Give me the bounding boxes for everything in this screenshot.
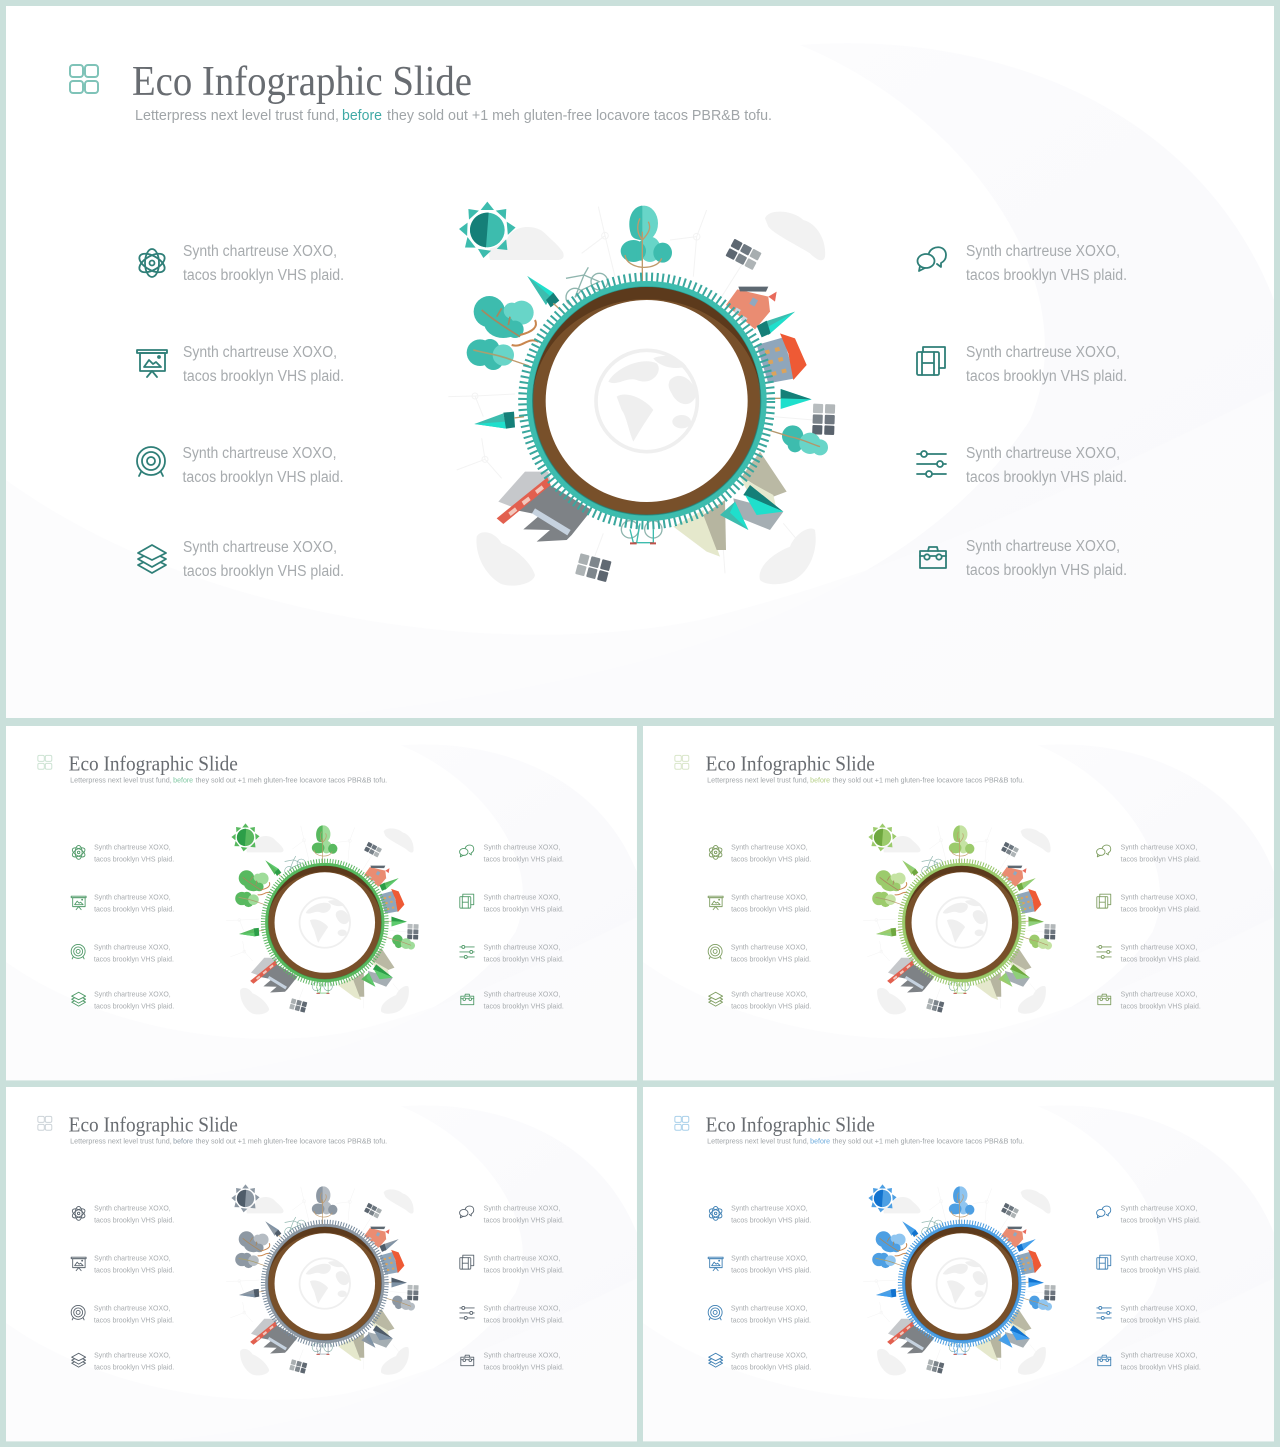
illustration: eco planet	[863, 1184, 1056, 1375]
item text: Synth chartreuse XOXO,	[182, 445, 336, 462]
left text: Synth chartreuse XOXO,	[731, 893, 808, 902]
left text: Synth chartreuse XOXO,	[94, 1351, 171, 1360]
icon: header grid	[70, 65, 98, 93]
illustration: eco planet	[226, 823, 419, 1014]
subtitle: they sold out +1 meh gluten-free locavore tacos PBR&B tofu.	[387, 107, 772, 124]
item: target	[137, 445, 344, 486]
item: briefcase	[920, 538, 1127, 579]
right icons	[460, 1206, 474, 1366]
right text	[1121, 842, 1201, 1011]
right text: Synth chartreuse XOXO,	[484, 1254, 560, 1263]
icon: briefcase	[920, 547, 946, 568]
subtitle: Letterpress next level trust fund,	[707, 776, 809, 785]
subtitle: before	[342, 107, 382, 124]
house: salmon	[726, 287, 777, 329]
right text: tacos brooklyn VHS plaid.	[484, 1002, 564, 1011]
trees: cones lower right	[720, 485, 783, 530]
subtitle	[70, 776, 387, 785]
subtitle: before	[810, 776, 830, 785]
left text: tacos brooklyn VHS plaid.	[94, 954, 174, 963]
illustration: eco planet	[448, 202, 835, 586]
right text: tacos brooklyn VHS plaid.	[484, 905, 564, 914]
right text: Synth chartreuse XOXO,	[484, 990, 560, 999]
left text	[94, 842, 174, 1011]
right text: Synth chartreuse XOXO,	[1121, 1303, 1197, 1312]
right text	[1121, 1203, 1201, 1372]
left text: Synth chartreuse XOXO,	[731, 990, 808, 999]
left text: tacos brooklyn VHS plaid.	[94, 1315, 174, 1324]
icon: film frame	[917, 347, 945, 375]
left text	[94, 1203, 174, 1372]
left text: Synth chartreuse XOXO,	[731, 1254, 808, 1263]
left text: tacos brooklyn VHS plaid.	[731, 854, 811, 863]
icon: globe	[596, 350, 697, 452]
tree: cone upper left	[527, 276, 565, 314]
left text: tacos brooklyn VHS plaid.	[731, 905, 811, 914]
illustration: eco planet	[226, 1184, 419, 1375]
item text: Synth chartreuse XOXO,	[183, 243, 337, 260]
item text: tacos brooklyn VHS plaid.	[182, 469, 344, 486]
icon: atom	[136, 249, 168, 277]
solar panel right	[812, 404, 835, 435]
tree: cone upper right	[757, 312, 795, 337]
factory	[497, 472, 592, 542]
left text	[731, 842, 811, 1011]
planet centre	[546, 300, 748, 502]
left text: tacos brooklyn VHS plaid.	[94, 1266, 174, 1275]
left icons	[71, 1206, 86, 1367]
tree: cone mid left	[474, 412, 524, 429]
house: red roof	[757, 333, 807, 383]
solar panel bottom	[575, 553, 612, 582]
subtitle: Letterpress next level trust fund,	[70, 1137, 172, 1146]
icon: header grid	[675, 755, 689, 769]
left text: tacos brooklyn VHS plaid.	[731, 954, 811, 963]
planet rim ticks	[523, 277, 771, 525]
right text: tacos brooklyn VHS plaid.	[484, 1215, 564, 1224]
right text: tacos brooklyn VHS plaid.	[1121, 1002, 1201, 1011]
right text: tacos brooklyn VHS plaid.	[1121, 1215, 1201, 1224]
subtitle: they sold out +1 meh gluten-free locavore tacos PBR&B tofu.	[196, 776, 387, 785]
illustration: eco planet	[863, 823, 1056, 1014]
subtitle: they sold out +1 meh gluten-free locavore tacos PBR&B tofu.	[833, 776, 1024, 785]
title: Eco Infographic Slide	[69, 1112, 238, 1136]
item: atom	[136, 243, 344, 284]
item text: Synth chartreuse XOXO,	[183, 344, 337, 361]
planet brown soil ring	[533, 287, 761, 515]
right text: tacos brooklyn VHS plaid.	[1121, 1363, 1201, 1372]
item text: tacos brooklyn VHS plaid.	[966, 469, 1127, 486]
right text: Synth chartreuse XOXO,	[1121, 842, 1197, 851]
right icons	[1097, 845, 1111, 1005]
item text	[966, 538, 1127, 579]
left text: tacos brooklyn VHS plaid.	[94, 1363, 174, 1372]
item: presentation	[137, 344, 344, 385]
left text: Synth chartreuse XOXO,	[731, 1303, 807, 1312]
tree: cone right	[768, 389, 812, 409]
panel: green slide	[6, 726, 637, 1080]
item text: tacos brooklyn VHS plaid.	[966, 562, 1127, 579]
item text: tacos brooklyn VHS plaid.	[183, 563, 344, 580]
left text: tacos brooklyn VHS plaid.	[94, 854, 174, 863]
subtitle	[707, 776, 1024, 785]
icon: presentation board	[137, 350, 167, 377]
item text: Synth chartreuse XOXO,	[966, 243, 1120, 260]
right text: Synth chartreuse XOXO,	[1121, 1203, 1197, 1212]
subtitle	[135, 107, 772, 124]
icon: layers	[138, 545, 166, 573]
left text: tacos brooklyn VHS plaid.	[731, 1002, 811, 1011]
left text: Synth chartreuse XOXO,	[94, 990, 171, 999]
item text: Synth chartreuse XOXO,	[183, 539, 337, 556]
item text	[183, 539, 344, 580]
subtitle: they sold out +1 meh gluten-free locavore tacos PBR&B tofu.	[196, 1137, 387, 1146]
clouds	[476, 212, 825, 586]
title: Eco Infographic Slide	[132, 59, 472, 105]
mountains	[673, 452, 787, 557]
right text: Synth chartreuse XOXO,	[484, 893, 560, 902]
left text: Synth chartreuse XOXO,	[731, 1203, 808, 1212]
left text: Synth chartreuse XOXO,	[94, 842, 171, 851]
right text: Synth chartreuse XOXO,	[484, 1351, 560, 1360]
right text: Synth chartreuse XOXO,	[1121, 1351, 1197, 1360]
right text: Synth chartreuse XOXO,	[484, 1203, 560, 1212]
title: Eco Infographic Slide	[69, 751, 238, 775]
subtitle	[70, 1137, 387, 1146]
tree: lower left	[467, 339, 529, 370]
item text: tacos brooklyn VHS plaid.	[183, 267, 344, 284]
icon: sliders	[917, 451, 946, 477]
left text	[731, 1203, 811, 1372]
right text: Synth chartreuse XOXO,	[1121, 990, 1197, 999]
item text	[182, 445, 344, 486]
right text: tacos brooklyn VHS plaid.	[484, 954, 564, 963]
tree: top centre	[621, 206, 672, 283]
item text: Synth chartreuse XOXO,	[966, 538, 1120, 555]
left text: tacos brooklyn VHS plaid.	[731, 1215, 811, 1224]
item text: tacos brooklyn VHS plaid.	[183, 368, 344, 385]
item: sliders	[917, 445, 1127, 486]
subtitle: before	[173, 1137, 193, 1146]
right icons	[1097, 1206, 1111, 1366]
icon: target	[137, 447, 165, 476]
right text: tacos brooklyn VHS plaid.	[1121, 905, 1201, 914]
icon: header grid	[38, 1116, 52, 1130]
panel: olive green slide	[643, 726, 1274, 1080]
title: Eco Infographic Slide	[706, 1112, 875, 1136]
right text: Synth chartreuse XOXO,	[1121, 942, 1197, 951]
subtitle: before	[810, 1137, 830, 1146]
right text: tacos brooklyn VHS plaid.	[1121, 954, 1201, 963]
tree: large left	[474, 296, 538, 346]
item text: tacos brooklyn VHS plaid.	[966, 368, 1127, 385]
item text	[966, 344, 1127, 385]
subtitle: Letterpress next level trust fund,	[135, 107, 339, 124]
subtitle: they sold out +1 meh gluten-free locavore tacos PBR&B tofu.	[833, 1137, 1024, 1146]
item: speech	[918, 243, 1127, 284]
subtitle: Letterpress next level trust fund,	[70, 776, 172, 785]
right text: tacos brooklyn VHS plaid.	[1121, 854, 1201, 863]
panel: main teal slide	[6, 6, 1274, 718]
title: Eco Infographic Slide	[706, 751, 875, 775]
left text: Synth chartreuse XOXO,	[94, 942, 170, 951]
right text: Synth chartreuse XOXO,	[1121, 893, 1197, 902]
left text: tacos brooklyn VHS plaid.	[731, 1266, 811, 1275]
solar panel top right	[725, 239, 762, 270]
panel: grey slide	[6, 1087, 637, 1441]
left text: Synth chartreuse XOXO,	[94, 893, 171, 902]
left text: Synth chartreuse XOXO,	[731, 942, 807, 951]
item text	[183, 344, 344, 385]
right text: tacos brooklyn VHS plaid.	[484, 1315, 564, 1324]
right text: tacos brooklyn VHS plaid.	[1121, 1315, 1201, 1324]
faint wind turbines	[448, 207, 813, 573]
item: layers	[138, 539, 344, 580]
right icons	[460, 845, 474, 1005]
planet teal ring	[527, 281, 767, 521]
right text: Synth chartreuse XOXO,	[484, 842, 560, 851]
icon: speech bubbles	[918, 247, 946, 271]
icon: header grid	[38, 755, 52, 769]
icon: bicycle top	[566, 267, 608, 306]
subtitle: before	[173, 776, 193, 785]
left text: Synth chartreuse XOXO,	[94, 1254, 171, 1263]
left text: Synth chartreuse XOXO,	[94, 1303, 170, 1312]
item text	[966, 445, 1127, 486]
left icons	[71, 845, 86, 1006]
right text	[484, 842, 564, 1011]
left text: tacos brooklyn VHS plaid.	[94, 1215, 174, 1224]
item text: Synth chartreuse XOXO,	[966, 445, 1120, 462]
left text: Synth chartreuse XOXO,	[731, 842, 808, 851]
left text: tacos brooklyn VHS plaid.	[731, 1315, 811, 1324]
left text: Synth chartreuse XOXO,	[94, 1203, 171, 1212]
item text: Synth chartreuse XOXO,	[966, 344, 1120, 361]
right text: Synth chartreuse XOXO,	[1121, 1254, 1197, 1263]
item text: tacos brooklyn VHS plaid.	[966, 267, 1127, 284]
left icons	[708, 845, 723, 1006]
tree: right	[768, 425, 828, 455]
right text: tacos brooklyn VHS plaid.	[484, 1363, 564, 1372]
right text	[484, 1203, 564, 1372]
left text: Synth chartreuse XOXO,	[731, 1351, 808, 1360]
icon: header grid	[675, 1116, 689, 1130]
right text: tacos brooklyn VHS plaid.	[484, 854, 564, 863]
left icons	[708, 1206, 723, 1367]
subtitle	[707, 1137, 1024, 1146]
subtitle: Letterpress next level trust fund,	[707, 1137, 809, 1146]
icon: bicycle bottom	[621, 521, 662, 543]
icon: sun	[459, 202, 516, 259]
right text: tacos brooklyn VHS plaid.	[484, 1266, 564, 1275]
left text: tacos brooklyn VHS plaid.	[731, 1363, 811, 1372]
item: film frame	[917, 344, 1127, 385]
left text: tacos brooklyn VHS plaid.	[94, 1002, 174, 1011]
panel: blue slide	[643, 1087, 1274, 1441]
right text: Synth chartreuse XOXO,	[484, 942, 560, 951]
right text: Synth chartreuse XOXO,	[484, 1303, 560, 1312]
item text	[183, 243, 344, 284]
right text: tacos brooklyn VHS plaid.	[1121, 1266, 1201, 1275]
left text: tacos brooklyn VHS plaid.	[94, 905, 174, 914]
item text	[966, 243, 1127, 284]
